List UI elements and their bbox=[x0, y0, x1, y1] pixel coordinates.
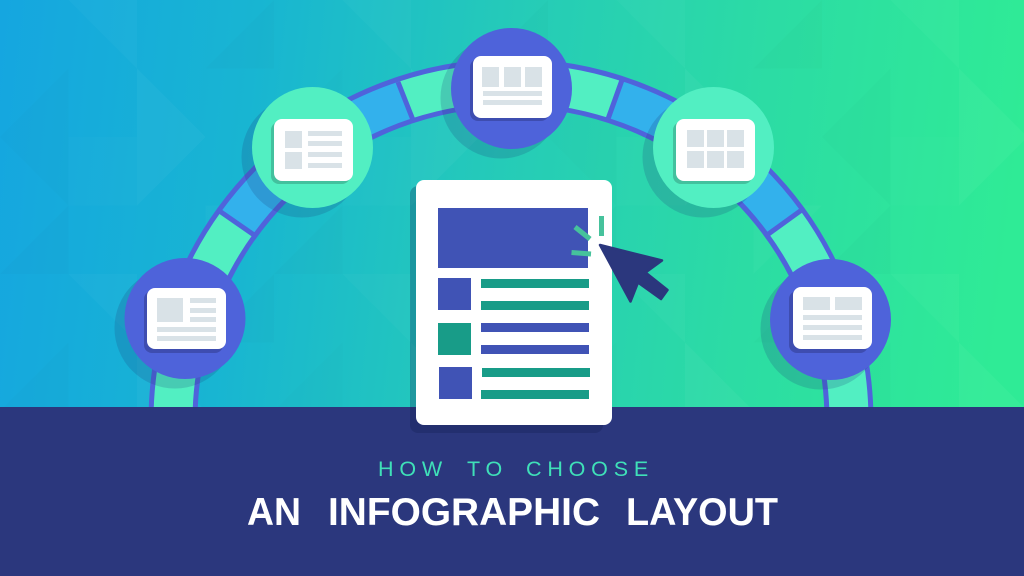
icon: cursor arrow bbox=[600, 245, 668, 302]
layout node: right bbox=[770, 259, 891, 380]
circle shadows bbox=[114, 38, 882, 390]
segmented arc band bbox=[173, 80, 849, 421]
subtitle: CHOOSE bbox=[526, 457, 654, 481]
subtitle: TO bbox=[467, 457, 508, 481]
navy title band bbox=[0, 407, 1024, 576]
arc segment: top mint bbox=[405, 83, 615, 100]
document row 2 bbox=[438, 323, 589, 355]
document banner bbox=[438, 208, 588, 268]
arc dividers bbox=[218, 80, 803, 235]
title: AN bbox=[247, 491, 301, 534]
title: LAYOUT bbox=[626, 491, 778, 534]
background gradient panel bbox=[0, 0, 1024, 410]
layout node: upper right bbox=[653, 87, 774, 208]
arc segment: upper right blue bbox=[615, 100, 784, 222]
subtitle: HOW bbox=[378, 457, 448, 481]
document row 1 bbox=[438, 278, 589, 310]
document row 3 bbox=[439, 367, 590, 399]
arc segment: upper left blue bbox=[237, 100, 405, 223]
layout node: top bbox=[451, 28, 572, 149]
layout node: left bbox=[124, 258, 246, 379]
layout node: upper left bbox=[252, 87, 373, 208]
title: INFOGRAPHIC bbox=[328, 491, 600, 534]
click sparks bbox=[572, 216, 602, 254]
arc segment: lower left mint bbox=[173, 223, 237, 421]
arc segment: lower right mint bbox=[784, 222, 849, 421]
title bbox=[247, 491, 778, 534]
central document bbox=[410, 180, 612, 433]
